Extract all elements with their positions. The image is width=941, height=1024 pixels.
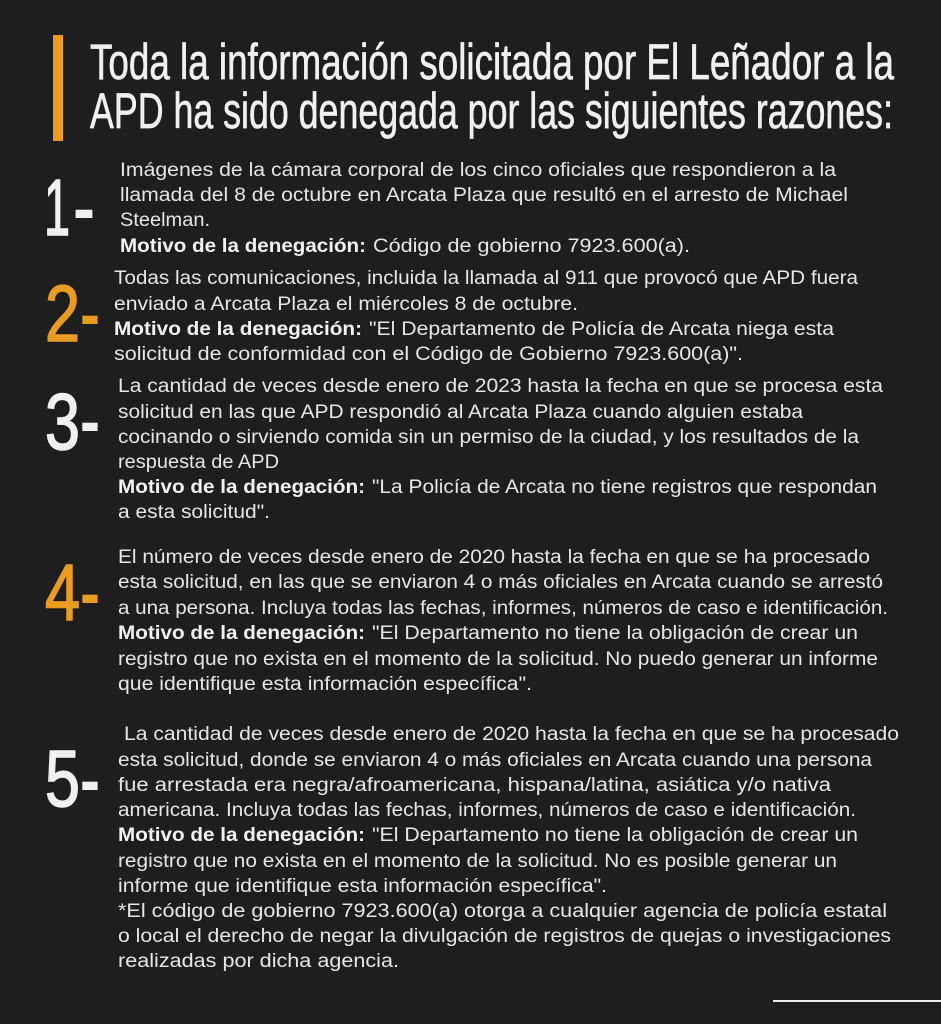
item 1 text: Steelman.: [120, 210, 210, 231]
number 2: 2: [45, 269, 80, 358]
item 3: [45, 376, 883, 523]
item 5 text: [118, 724, 899, 972]
item 3 text: respuesta de APD: [118, 452, 279, 473]
item 1 text: [120, 160, 848, 257]
number 4: -: [80, 554, 100, 632]
orange accent bar: [53, 35, 63, 141]
title: [90, 34, 894, 139]
number 5: -: [80, 741, 100, 819]
item 4 text: [118, 547, 888, 695]
footnote: realizadas por dicha agencia.: [118, 951, 399, 972]
item 5 text: esta solicitud, donde se enviaron 4 o más oficiales en Arcata cuando una persona: [118, 750, 872, 771]
number 4: 4: [45, 548, 80, 637]
item 3 text: La cantidad de veces desde enero de 2023 hasta la fecha en que se procesa esta: [118, 376, 883, 397]
item 5: [45, 724, 899, 972]
number 3: -: [80, 382, 100, 460]
item 1 text: Imágenes de la cámara corporal de los cinco oficiales que respondieron a la: [120, 160, 836, 181]
footnote: *El código de gobierno 7923.600(a) otorga a cualquier agencia de policía estatal: [118, 901, 887, 922]
item 4 text: El número de veces desde enero de 2020 hasta la fecha en que se ha procesado: [118, 547, 870, 568]
item 3 text: solicitud en las que APD respondió al Arcata Plaza cuando alguien estaba: [118, 402, 803, 423]
footnote: [118, 901, 891, 972]
item 4 text: registro que no exista en el momento de la solicitud. No puedo generar un informe: [118, 649, 878, 670]
item 5 text: "El Departamento no tiene la obligación de crear un: [372, 825, 858, 846]
item 1 text: Código de gobierno 7923.600(a).: [373, 236, 690, 257]
footnote: o local el derecho de negar la divulgación de registros de quejas o investigaciones: [118, 926, 891, 947]
item 4 text: Motivo de la denegación:: [118, 623, 365, 644]
item 2 text: Motivo de la denegación:: [114, 319, 362, 340]
item 1 text: Motivo de la denegación:: [120, 236, 366, 257]
number 3: 3: [45, 377, 80, 466]
item 1 text: llamada del 8 de octubre en Arcata Plaza que resultó en el arresto de Michael: [120, 185, 848, 206]
item 1: [44, 160, 848, 257]
item 4 text: que identifique esta información específica".: [118, 674, 532, 695]
item 3 text: "La Policía de Arcata no tiene registros que respondan: [372, 477, 877, 498]
item 2 text: solicitud de conformidad con el Código de Gobierno 7923.600(a)".: [114, 344, 743, 365]
item 5 text: La cantidad de veces desde enero de 2020 hasta la fecha en que se ha procesado: [124, 724, 899, 745]
item 4 text: esta solicitud, en las que se enviaron 4 o más oficiales en Arcata cuando se arrestó: [118, 572, 883, 593]
item 5 text: fue arrestada era negra/afroamericana, hispana/latina, asiática y/o nativa: [118, 775, 831, 796]
number 1: -: [73, 169, 95, 247]
item 4 text: "El Departamento no tiene la obligación de crear un: [372, 623, 858, 644]
item 4 text: a una persona. Incluya todas las fechas, informes, números de caso e identificación.: [118, 598, 888, 619]
item 2 text: "El Departamento de Policía de Arcata niega esta: [369, 319, 834, 340]
item 5 text: registro que no exista en el momento de la solicitud. No es posible generar un: [118, 851, 837, 872]
item 3 text: [118, 376, 883, 523]
number 5: 5: [45, 734, 80, 823]
item 5 text: informe que identifique esta información específica".: [118, 876, 607, 897]
item 5 text: Motivo de la denegación:: [118, 825, 365, 846]
number 1: 1: [44, 163, 70, 252]
item 5 text: americana. Incluya todas las fechas, informes, números de caso e identificación.: [118, 800, 856, 821]
item 4: [45, 547, 888, 695]
item 3 text: cocinando o sirviendo comida sin un permiso de la ciudad, y los resultados de la: [118, 427, 859, 448]
item 2 text: enviado a Arcata Plaza el miércoles 8 de octubre.: [114, 294, 578, 315]
item 2 text: Todas las comunicaciones, incluida la llamada al 911 que provocó que APD fuera: [114, 268, 858, 289]
item 2: [45, 268, 858, 365]
item 2 text: [114, 268, 858, 365]
item 3 text: Motivo de la denegación:: [118, 477, 365, 498]
number 2: -: [80, 275, 100, 353]
item 3 text: a esta solicitud".: [118, 502, 270, 523]
